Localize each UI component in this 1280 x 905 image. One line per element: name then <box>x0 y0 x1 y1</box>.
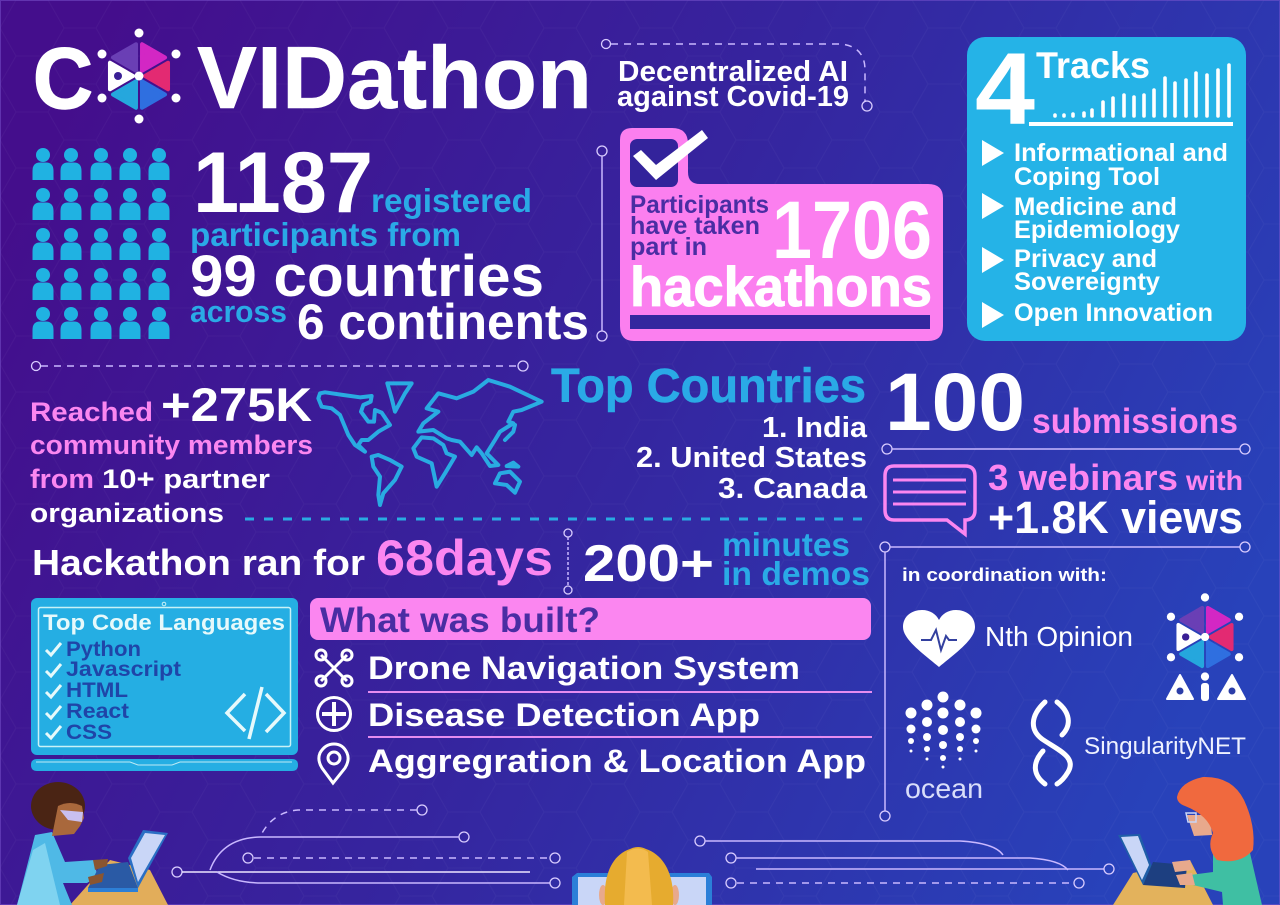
demo minutes: 200+ <box>583 535 714 593</box>
hackathon duration <box>32 530 553 586</box>
divider: dashed blue line <box>245 518 870 520</box>
panel: hackathons: have taken <box>630 212 760 240</box>
icon: grid of people <box>32 148 170 339</box>
illustration: person with laptop right <box>1113 777 1262 905</box>
partners: in coordination with: <box>902 565 1107 585</box>
track list: Privacy and <box>1014 245 1157 273</box>
top countries: 3. Canada <box>718 473 868 505</box>
track list: Informational and <box>1014 139 1228 167</box>
demo minutes <box>583 526 870 593</box>
panel: hackathons: Participants <box>630 191 769 219</box>
reach statistics: Reached <box>30 397 153 427</box>
track list: Open Innovation <box>1014 299 1213 327</box>
language list: HTML <box>66 679 128 702</box>
reach statistics: from <box>30 464 94 494</box>
demo minutes: minutes <box>722 526 850 563</box>
partner: SingularityNET: SingularityNET <box>1084 733 1246 760</box>
title: COVIDathon: C <box>33 31 93 127</box>
title: COVIDathon: VIDathon <box>197 28 592 127</box>
tagline: Decentralized AI <box>618 56 848 88</box>
panel: hackathons <box>620 128 943 341</box>
top countries: Top Countries <box>551 360 866 413</box>
panel: top code languages laptop: Top Code Languages <box>43 610 285 635</box>
panel: what was built: Aggregration & Location App <box>368 743 866 779</box>
world map <box>318 380 542 505</box>
panel: top code languages laptop <box>31 598 298 771</box>
reach statistics: community members <box>30 430 313 460</box>
partner: ocean: ocean <box>905 773 983 804</box>
webinars: +1.8K views <box>988 492 1243 543</box>
track list <box>982 139 1228 328</box>
hackathon duration: Hackathon ran for <box>32 542 365 583</box>
track list: Coping Tool <box>1014 163 1160 191</box>
panel: 4 tracks <box>967 32 1246 341</box>
panel: hackathons: part in <box>630 233 707 261</box>
participants statistics: registered <box>371 182 532 219</box>
illustration: person with laptop left <box>17 782 168 905</box>
panel: what was built: What was built? <box>320 601 600 640</box>
language list: React <box>66 700 129 723</box>
webinars: 3 webinars <box>988 457 1178 498</box>
panel: 4 tracks: 4 <box>975 32 1035 146</box>
tagline: against Covid-19 <box>617 81 849 113</box>
illustration: person with helmet centre <box>572 847 712 905</box>
partner: Nth Opinion <box>903 610 1133 667</box>
language list: CSS <box>66 721 112 744</box>
submissions <box>885 357 1238 448</box>
track list: Sovereignty <box>1014 268 1160 296</box>
webinars: with <box>1185 465 1243 496</box>
top countries: 2. United States <box>636 442 867 474</box>
participants statistics: participants from <box>190 216 461 253</box>
tagline <box>617 56 849 113</box>
icon: plus in circle <box>318 698 350 730</box>
submissions: 100 <box>885 357 1025 448</box>
partners <box>902 565 1246 804</box>
icon: code brackets <box>227 687 284 739</box>
top countries: 1. India <box>762 412 868 444</box>
participants statistics: 1187 <box>193 135 373 231</box>
panel: hackathons: hackathons <box>630 255 932 318</box>
language list <box>46 638 181 744</box>
partner: ocean <box>905 692 983 804</box>
hackathon duration: 68days <box>376 530 553 586</box>
track list: Medicine and <box>1014 193 1177 221</box>
webinars <box>988 457 1243 543</box>
icon: drone <box>316 650 352 686</box>
participants statistics: 99 countries <box>190 244 544 309</box>
reach statistics: organizations <box>30 498 224 528</box>
track list: Epidemiology <box>1014 216 1180 244</box>
language list: Python <box>66 638 141 661</box>
panel: what was built: Drone Navigation System <box>368 650 800 686</box>
icon: checkbox <box>630 130 708 187</box>
icon: location pin <box>319 744 348 783</box>
logo: hexagon in title <box>98 28 180 124</box>
icon: chat bubble <box>885 466 975 534</box>
reach statistics: 10+ partner <box>102 464 271 494</box>
panel: what was built: Disease Detection App <box>368 697 760 733</box>
reach statistics <box>30 378 313 528</box>
circuit lines bottom <box>172 805 1114 888</box>
top countries <box>551 360 868 505</box>
bar chart: tracks equalizer <box>1055 65 1229 116</box>
participants statistics <box>190 135 589 350</box>
partner: Nth Opinion: Nth Opinion <box>985 621 1133 652</box>
panel: what was built <box>310 598 872 783</box>
participants statistics: across <box>190 294 287 329</box>
panel: hackathons: 1706 <box>772 185 932 276</box>
demo minutes: in demos <box>722 555 870 592</box>
language list: Javascript <box>66 658 181 681</box>
partner: SingularityNET <box>1033 702 1246 784</box>
submissions: submissions <box>1032 402 1238 441</box>
reach statistics: +275K <box>161 378 312 431</box>
panel: 4 tracks: Tracks <box>1036 45 1150 86</box>
title: COVIDathon <box>33 28 592 127</box>
participants statistics: 6 continents <box>297 294 589 350</box>
partner: AiA logo <box>1167 593 1245 701</box>
